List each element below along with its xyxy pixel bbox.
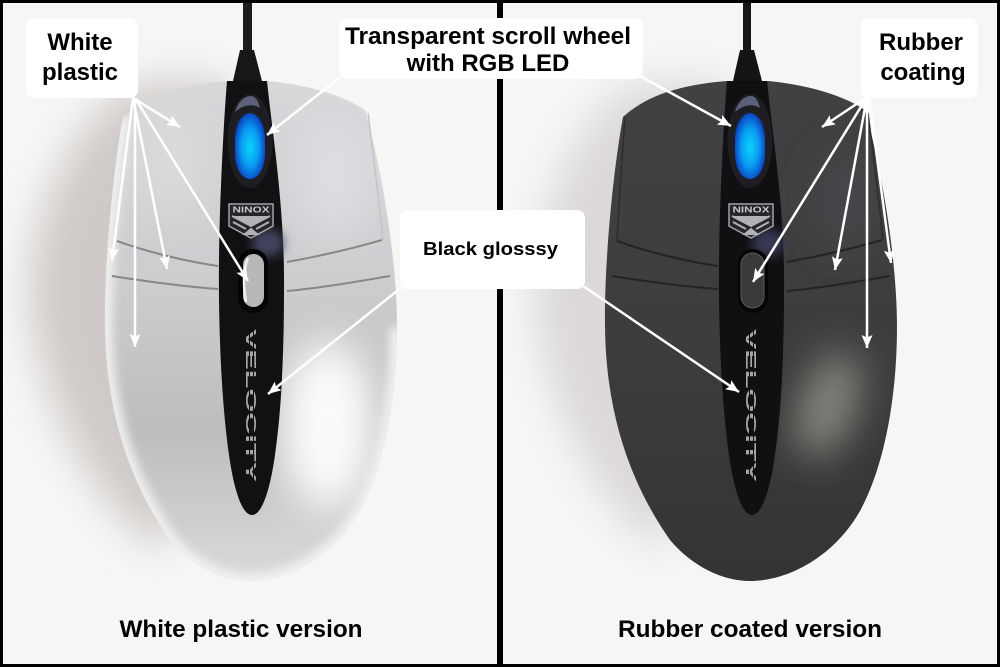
panel seams — [612, 240, 890, 291]
rubber coated mouse — [605, 0, 897, 581]
mouse shadow — [535, 80, 800, 550]
caption: rubber coated version: Rubber coated version — [618, 616, 882, 643]
arrow: black glossy left — [268, 287, 402, 394]
NINOX logo: NINOX — [732, 204, 770, 214]
callout: transparent scroll wheel: with RGB LED — [406, 50, 569, 77]
callout: rubber coating — [861, 18, 978, 98]
mouse body — [105, 81, 397, 581]
callout: black glossy — [400, 210, 585, 289]
panel: rubber coated version — [503, 0, 997, 664]
NINOX logo: NINOX — [232, 204, 270, 214]
strain relief — [233, 50, 262, 81]
callout: rubber coating: Rubber — [879, 29, 963, 56]
cable — [743, 0, 751, 55]
arrow: black glossy right — [583, 286, 739, 392]
VELOCITY lettering: VELOCITY — [242, 329, 259, 482]
callout: rubber coating: coating — [880, 59, 966, 86]
scroll wheel — [228, 94, 272, 188]
callout: transparent scroll wheel — [339, 18, 643, 79]
arrows: rubber coating — [753, 97, 891, 348]
mouse shadow — [30, 80, 300, 550]
caption: white plastic version: White plastic version — [120, 616, 362, 643]
callout: white plastic — [26, 18, 138, 98]
black glossy strip — [719, 81, 784, 515]
VELOCITY lettering: VELOCITY — [742, 329, 759, 482]
callout: white plastic: plastic — [42, 59, 118, 86]
NINOX logo — [729, 204, 773, 238]
white plastic mouse — [105, 0, 397, 581]
VELOCITY lettering — [242, 329, 259, 483]
black glossy strip — [219, 81, 284, 515]
callout: black glossy: Black glosssy — [423, 239, 558, 259]
arrows: white plastic — [112, 98, 248, 347]
scroll button — [238, 249, 268, 313]
panel: white plastic version — [3, 0, 497, 664]
arrow: scroll wheel left — [267, 78, 339, 135]
callout: white plastic: White — [47, 29, 113, 56]
strain relief — [733, 50, 762, 81]
VELOCITY lettering — [742, 329, 759, 483]
arrow: scroll wheel right — [640, 76, 731, 126]
mouse body — [605, 81, 897, 581]
scroll wheel — [728, 94, 772, 188]
callout: transparent scroll wheel: Transparent scroll wheel — [345, 23, 631, 50]
NINOX logo — [229, 204, 273, 238]
panel seams — [112, 240, 390, 291]
cable — [243, 0, 252, 55]
scroll button — [738, 249, 768, 313]
